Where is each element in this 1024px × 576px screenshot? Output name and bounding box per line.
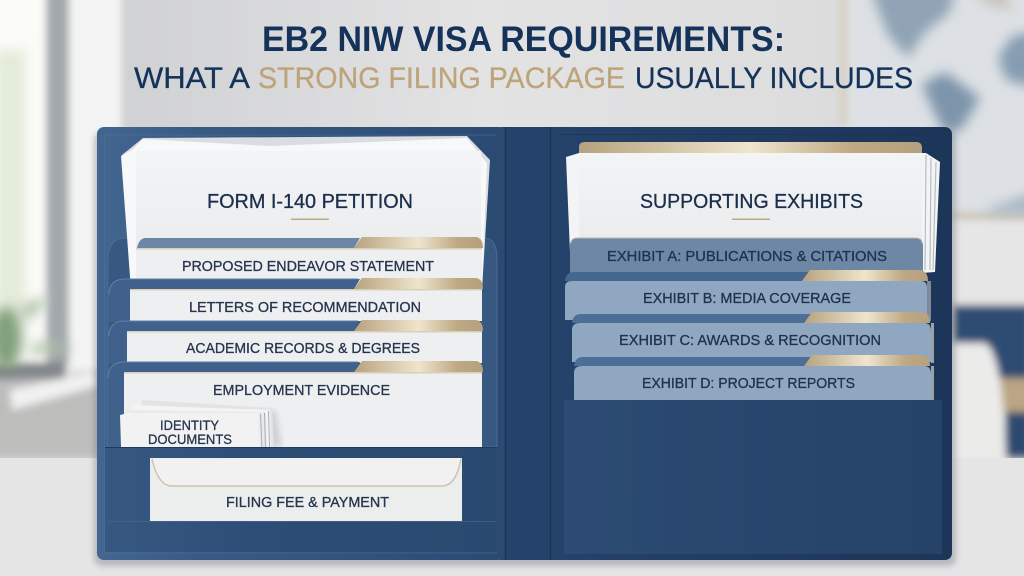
front pocket [564,400,942,554]
title line 2 [134,62,913,95]
card: Exhibit A [570,238,923,276]
gold top tab [579,142,922,153]
envelope: Filing Fee & Payment [150,458,462,521]
card: Exhibit C: EXHIBIT C: AWARDS & RECOGNITION [619,332,881,349]
card: Exhibit C [572,312,934,363]
card: Exhibit A: EXHIBIT A: PUBLICATIONS & CITATIONS [607,248,887,265]
card: Academic Records & Degrees [109,320,483,364]
card: Employment Evidence: EMPLOYMENT EVIDENCE [213,382,390,399]
card: Identity Documents [120,400,282,447]
title line 2: USUALLY INCLUDES [635,62,913,95]
front pocket [105,447,497,552]
card: Exhibit B: EXHIBIT B: MEDIA COVERAGE [643,290,851,307]
pocket backs [108,238,497,447]
card: Proposed Endeavor Statement [136,237,483,280]
paper stack [121,136,490,291]
card: Exhibit D: EXHIBIT D: PROJECT REPORTS [642,375,855,392]
folder spine [505,127,552,560]
card: Exhibit D [574,355,934,401]
folder [94,127,956,566]
panel: right pocket, Supporting Exhibits [564,142,942,554]
heading: Form I-140 Petition: FORM I-140 PETITION [207,190,413,213]
paper stack [566,153,940,300]
card: Employment Evidence [108,361,483,447]
title line 2: STRONG FILING PACKAGE [258,62,625,95]
card: Letters of Recommendation: LETTERS OF RECOMMENDATION [189,299,421,316]
card: Letters of Recommendation [109,278,483,322]
envelope: Filing Fee & Payment: FILING FEE & PAYMENT [226,494,389,511]
card: Exhibit B [565,270,931,321]
panel: left pocket, Form I-140 [105,136,497,552]
card: Identity Documents: DOCUMENTS [148,431,232,447]
card: Academic Records & Degrees: ACADEMIC RECORDS & DEGREES [186,340,420,357]
card: Identity Documents: IDENTITY [160,417,220,433]
title line 2: WHAT A [134,62,250,95]
card: Proposed Endeavor Statement: PROPOSED ENDEAVOR STATEMENT [182,258,434,275]
heading: Supporting Exhibits: SUPPORTING EXHIBITS [640,190,863,213]
title line 1: EB2 NIW VISA REQUIREMENTS: [262,20,785,59]
title [134,20,913,95]
